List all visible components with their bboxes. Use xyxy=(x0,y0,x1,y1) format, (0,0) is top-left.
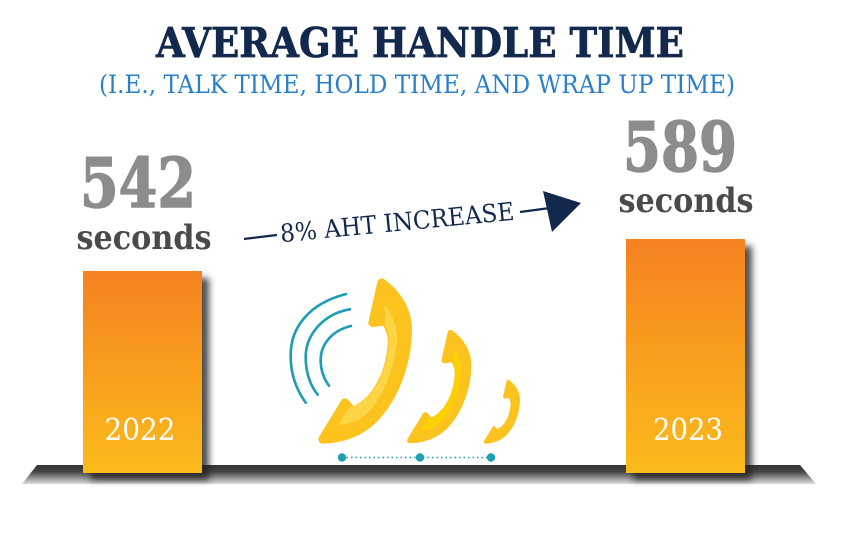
bar: 2022: 2022 xyxy=(104,413,176,448)
value: 542 seconds xyxy=(76,144,212,258)
platform xyxy=(22,465,816,484)
icon: small phone xyxy=(485,381,518,442)
value: 589 seconds xyxy=(618,108,754,221)
value: 589 seconds: 589 xyxy=(623,108,737,188)
bar: 2023: 2023 xyxy=(653,413,723,448)
icon: sound waves xyxy=(291,294,351,403)
title: AVERAGE HANDLE TIME xyxy=(155,19,684,67)
value: 542 seconds: 542 xyxy=(80,144,196,224)
bar: 2023 xyxy=(626,239,752,480)
subtitle: (I.E., TALK TIME, HOLD TIME, AND WRAP UP TIME) xyxy=(99,70,735,99)
icon: medium phone xyxy=(410,333,468,440)
bar: 2022 xyxy=(83,271,209,480)
dotted timeline xyxy=(338,453,495,462)
arrow: 8% AHT increase: 8% AHT INCREASE xyxy=(279,197,516,248)
value: 589 seconds: seconds xyxy=(618,181,754,221)
icon: large phone xyxy=(323,283,408,439)
value: 542 seconds: seconds xyxy=(76,218,212,258)
